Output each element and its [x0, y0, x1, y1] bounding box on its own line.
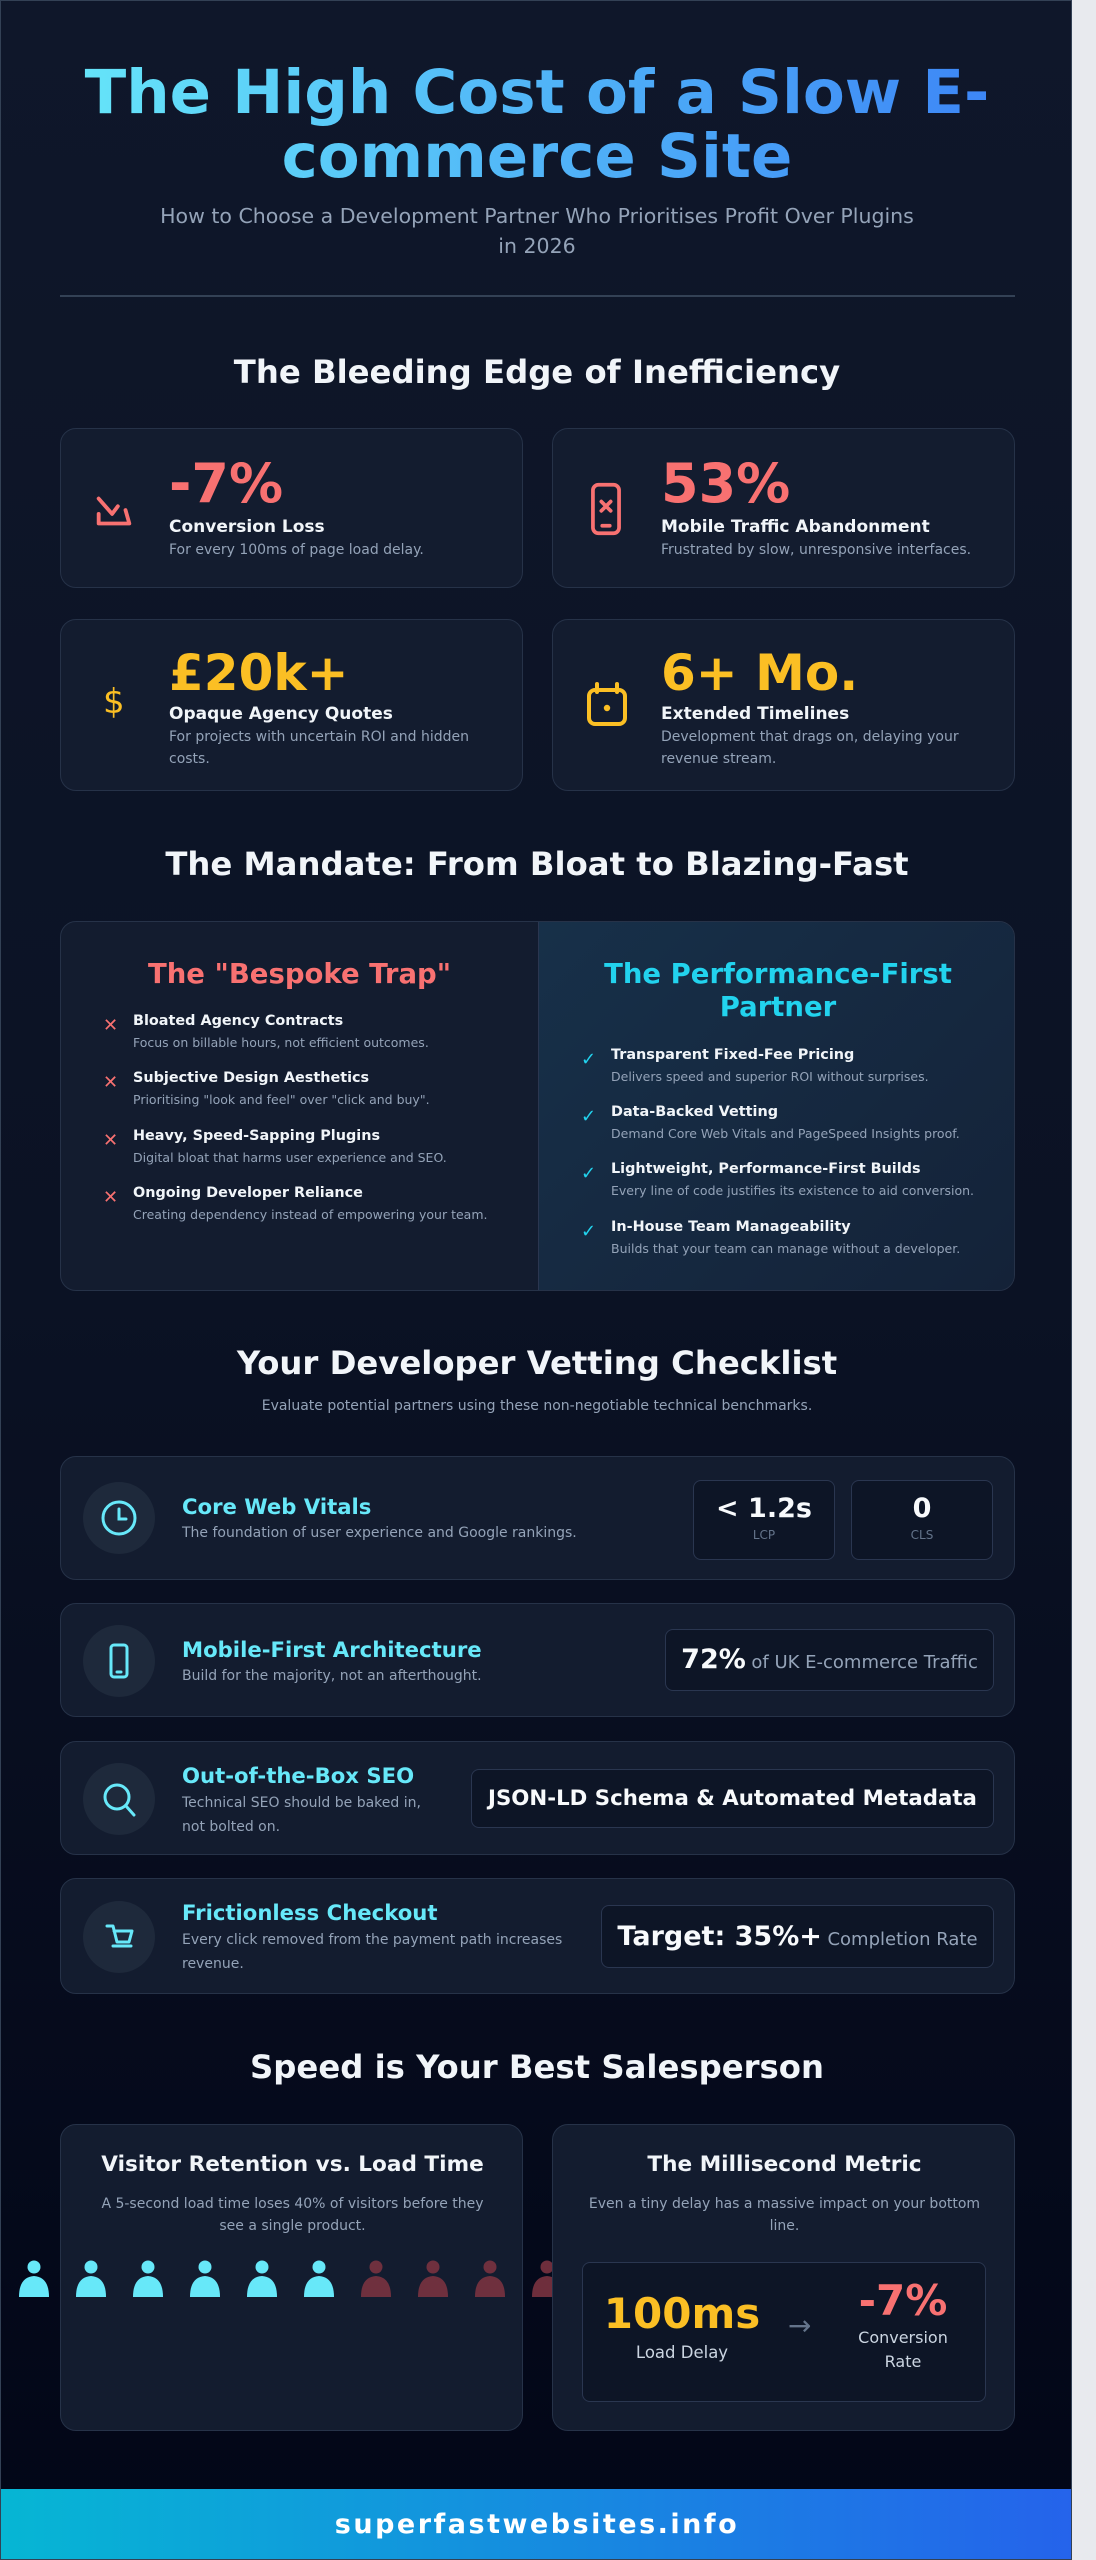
panel: performance-first partner [538, 922, 1016, 1292]
stat card: timelines: Extended Timelines [661, 704, 849, 724]
icon: clock [83, 1482, 155, 1554]
footer: superfastwebsites.info [335, 2509, 739, 2540]
list: partner items [581, 1047, 974, 1256]
callout: delay to conversion: Load Delay [636, 2343, 728, 2362]
checklist: core web vitals: The foundation of user experience and Google rankings. [182, 1525, 577, 1541]
checklist: seo: Technical SEO should be baked in, not bolted on. [182, 1795, 421, 1835]
stat card: mobile abandonment: Frustrated by slow, unresponsive interfaces. [661, 542, 971, 558]
panel: bespoke trap: ✕ [103, 1187, 118, 1208]
checklist: core web vitals: Core Web Vitals [182, 1494, 371, 1519]
metric: LCP [693, 1480, 835, 1560]
heading: mandate: The Mandate: From Bloat to Blazing-Fast [165, 845, 909, 883]
callout: delay to conversion [582, 2262, 986, 2402]
list: trap items [103, 1013, 488, 1222]
stat card: timelines: Development that drags on, delaying your revenue stream. [661, 729, 959, 767]
list: partner items: Builds that your team can manage without a developer. [611, 1241, 960, 1256]
stat card: agency quotes: Opaque Agency Quotes [169, 704, 393, 724]
list: partner items: Delivers speed and superior ROI without surprises. [611, 1069, 929, 1084]
panel: bespoke trap: ✕ [103, 1015, 118, 1036]
panel: bespoke trap: ✕ [103, 1072, 118, 1093]
heading: bleeding edge: The Bleeding Edge of Inefficiency [234, 353, 840, 391]
comparison panel [60, 921, 1015, 1291]
checklist subtitle: Evaluate potential partners using these non-negotiable technical benchmarks. [262, 1398, 812, 1414]
checklist: core web vitals [60, 1456, 1015, 1580]
stat card: conversion loss: Conversion Loss [169, 517, 325, 537]
stat card: mobile abandonment: 53% [661, 452, 790, 515]
list: trap items: Ongoing Developer Reliance [133, 1185, 363, 1201]
stat card: conversion loss [60, 428, 523, 588]
panel: performance-first partner: ✓ [581, 1049, 596, 1070]
panel: performance-first partner: ✓ [581, 1221, 596, 1242]
subtitle [160, 204, 914, 258]
list: partner items: Demand Core Web Vitals and PageSpeed Insights proof. [611, 1126, 960, 1141]
list: partner items: Every line of code justifies its existence to aid conversion. [611, 1183, 974, 1198]
heading: bespoke trap: The "Bespoke Trap" [148, 958, 451, 990]
checklist: checkout [60, 1878, 1015, 1994]
stat card: conversion loss: -7% [169, 452, 283, 515]
metric: LCP: LCP [753, 1528, 775, 1542]
stat card: agency quotes [60, 619, 523, 791]
checklist: checkout: Frictionless Checkout [182, 1900, 438, 1925]
icon: phone x [591, 482, 621, 536]
card: visitor retention: Visitor Retention vs. Load Time [101, 2152, 484, 2177]
checklist: mobile first: Build for the majority, not an afterthought. [182, 1668, 482, 1684]
card: visitor retention: A 5-second load time loses 40% of visitors before they see a single product. [101, 2196, 484, 2234]
icon: phone [83, 1625, 155, 1697]
subtitle: How to Choose a Development Partner Who Prioritises Profit Over Plugins [160, 204, 914, 228]
metric: CLS: CLS [911, 1528, 933, 1542]
metric: target [601, 1905, 994, 1968]
metric: 72%: 72% of UK E-commerce Traffic [681, 1644, 978, 1675]
card: millisecond metric: Even a tiny delay has a massive impact on your bottom line. [589, 2196, 980, 2234]
checklist: checkout: Every click removed from the payment path increases revenue. [182, 1932, 562, 1972]
metric: LCP: < 1.2s [716, 1493, 812, 1524]
list: trap items: Focus on billable hours, not efficient outcomes. [133, 1035, 429, 1050]
metric: CLS: 0 [913, 1493, 931, 1524]
list: partner items: Transparent Fixed-Fee Pricing [611, 1047, 854, 1063]
icon: trend down [96, 496, 132, 526]
card: millisecond metric [552, 2124, 1015, 2431]
heading: performance partner [604, 958, 952, 1023]
metric: 72% [665, 1629, 994, 1691]
panel: performance-first partner: ✓ [581, 1163, 596, 1184]
footer [1, 2489, 1073, 2560]
stat card: agency quotes: For projects with uncertain ROI and hidden costs. [169, 729, 469, 767]
subtitle: in 2026 [498, 234, 576, 258]
metric: CLS [851, 1480, 993, 1560]
card: visitor retention [60, 2124, 523, 2431]
panel: performance-first partner: ✓ [581, 1106, 596, 1127]
list: trap items: Heavy, Speed-Sapping Plugins [133, 1128, 380, 1144]
stat card: timelines [552, 619, 1015, 791]
stat card: conversion loss: For every 100ms of page load delay. [169, 542, 424, 558]
checklist: mobile first [60, 1603, 1015, 1717]
metric: target: Target: 35%+ Completion Rate [617, 1921, 978, 1952]
list: trap items: Bloated Agency Contracts [133, 1013, 343, 1029]
icon: cart [83, 1901, 155, 1973]
list: trap items: Creating dependency instead of empowering your team. [133, 1207, 488, 1222]
checklist: mobile first: Mobile-First Architecture [182, 1637, 482, 1662]
heading: checklist: Your Developer Vetting Checklist [237, 1344, 837, 1382]
list: partner items: Data-Backed Vetting [611, 1104, 778, 1120]
callout: delay to conversion: 100ms [604, 2289, 760, 2338]
stat card: timelines: 6+ Mo. [661, 644, 858, 702]
callout: delay to conversion: -7% [859, 2276, 947, 2325]
icon: search [83, 1763, 155, 1835]
metric: schema [471, 1769, 994, 1828]
panel: bespoke trap [103, 958, 488, 1222]
heading: speed: Speed is Your Best Salesperson [250, 2048, 824, 2086]
card: millisecond metric: The Millisecond Metric [647, 2152, 922, 2177]
title: The High Cost of a Slow E-commerce Site [85, 57, 989, 192]
heading: performance partner: The Performance-First [604, 958, 952, 990]
heading: performance partner: Partner [720, 991, 836, 1023]
panel: bespoke trap: ✕ [103, 1130, 118, 1151]
chart: visitor icons [19, 2260, 552, 2297]
checklist: seo: Out-of-the-Box SEO [182, 1763, 414, 1788]
list: trap items: Digital bloat that harms user experience and SEO. [133, 1150, 447, 1165]
icon: dollar: $ [103, 682, 125, 722]
stat card: mobile abandonment: Mobile Traffic Abandonment [661, 517, 930, 537]
list: partner items: In-House Team Manageability [611, 1219, 851, 1235]
stat card: mobile abandonment [552, 428, 1015, 588]
list: trap items: Prioritising "look and feel" over "click and buy". [133, 1092, 430, 1107]
metric: schema: JSON-LD Schema & Automated Metadata [488, 1786, 977, 1811]
list: trap items: Subjective Design Aesthetics [133, 1070, 369, 1086]
icon: calendar [587, 682, 627, 726]
checklist: seo [60, 1741, 1015, 1855]
callout: delay to conversion: Conversion Rate [858, 2328, 948, 2371]
arrow: → [788, 2309, 811, 2342]
stat card: agency quotes: £20k+ [169, 644, 349, 702]
list: partner items: Lightweight, Performance-First Builds [611, 1161, 921, 1177]
